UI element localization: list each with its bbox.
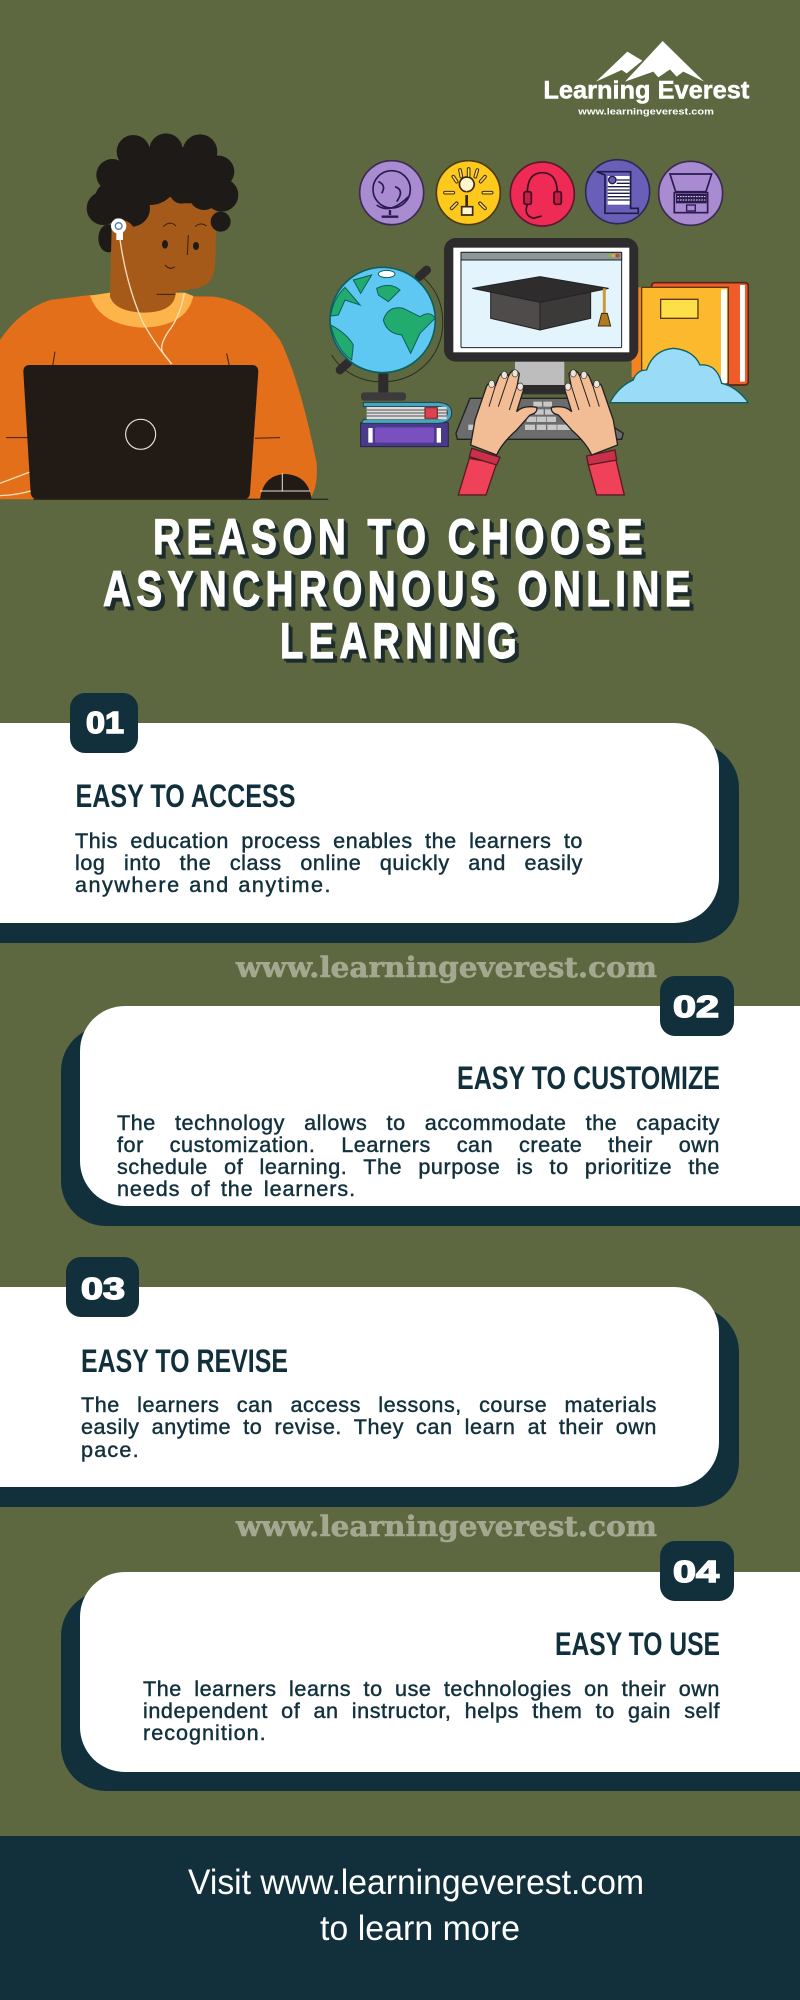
body text [117, 1110, 720, 1201]
body text: The learners learns to use technologies on their own [143, 1676, 720, 1701]
badge 01 [70, 693, 138, 753]
cloud [610, 348, 748, 403]
body text: anywhere and anytime. [75, 872, 332, 897]
panel: card 03 easy to revise [0, 1257, 739, 1507]
body text: schedule of learning. The purpose is to prioritize the [117, 1154, 720, 1179]
footer text: Visit www.learningeverest.com [188, 1863, 644, 1902]
body text: easily anytime to revise. They can learn at their own [81, 1414, 657, 1439]
graduation cap [472, 277, 611, 330]
body text: The technology allows to accommodate the capacity [117, 1110, 720, 1135]
logo: Learning Everest: Learning Everest [543, 77, 750, 105]
illustration: person with laptop [0, 133, 328, 499]
body text: log into the class online quickly and easily [75, 850, 583, 875]
title: LEARNING [280, 613, 522, 669]
watermark 1: www.learningeverest.com [235, 951, 657, 984]
badge 04 [660, 1541, 734, 1601]
badge 02: 02 [673, 989, 719, 1024]
badge 03 [66, 1257, 139, 1317]
footer text: to learn more [320, 1909, 520, 1948]
keyboard [456, 398, 623, 439]
footer text [188, 1863, 644, 1948]
body text: needs of the learners. [117, 1176, 356, 1201]
panel: card 02 easy to customize [61, 976, 800, 1226]
icon: headset [510, 162, 574, 226]
globe [330, 267, 443, 401]
left sleeve [458, 448, 500, 495]
body text: independent of an instructor, helps them to gain self [143, 1698, 720, 1723]
watermark 2: www.learningeverest.com [235, 1510, 657, 1543]
right hand [551, 370, 618, 455]
panel: card 01 easy to access [0, 693, 739, 943]
icon: light bulb [436, 161, 500, 225]
icon: laptop [659, 161, 723, 225]
icon: globe [360, 161, 424, 225]
badge 04: 04 [673, 1554, 720, 1589]
illustration: computer, globe, books [330, 238, 748, 495]
computer monitor [444, 238, 638, 394]
left hand [471, 370, 537, 455]
body text [143, 1676, 720, 1745]
body text: The learners can access lessons, course materials [81, 1392, 657, 1417]
badge 02 [660, 976, 734, 1036]
illustration: header artwork [0, 41, 750, 500]
binder books [632, 283, 748, 385]
body text: This education process enables the learners to [75, 828, 583, 853]
logo: Learning Everest: www.learningeverest.com [577, 106, 714, 116]
footer [0, 1836, 800, 2000]
badge 01: 01 [86, 705, 124, 740]
body text [81, 1392, 657, 1462]
right sleeve [587, 450, 624, 495]
badge 03: 03 [81, 1271, 125, 1306]
icons: five round topic badges [360, 160, 723, 226]
body text [75, 828, 583, 897]
stacked books [361, 402, 452, 447]
icon: document scroll [586, 160, 650, 224]
logo: Learning Everest [543, 41, 750, 116]
body text: pace. [81, 1437, 140, 1462]
panel: card 04 easy to use [61, 1541, 800, 1791]
title [103, 509, 696, 669]
body text: for customization. Learners can create their own [117, 1132, 720, 1157]
title: REASON TO CHOOSE [153, 509, 648, 565]
body text: recognition. [143, 1720, 267, 1745]
